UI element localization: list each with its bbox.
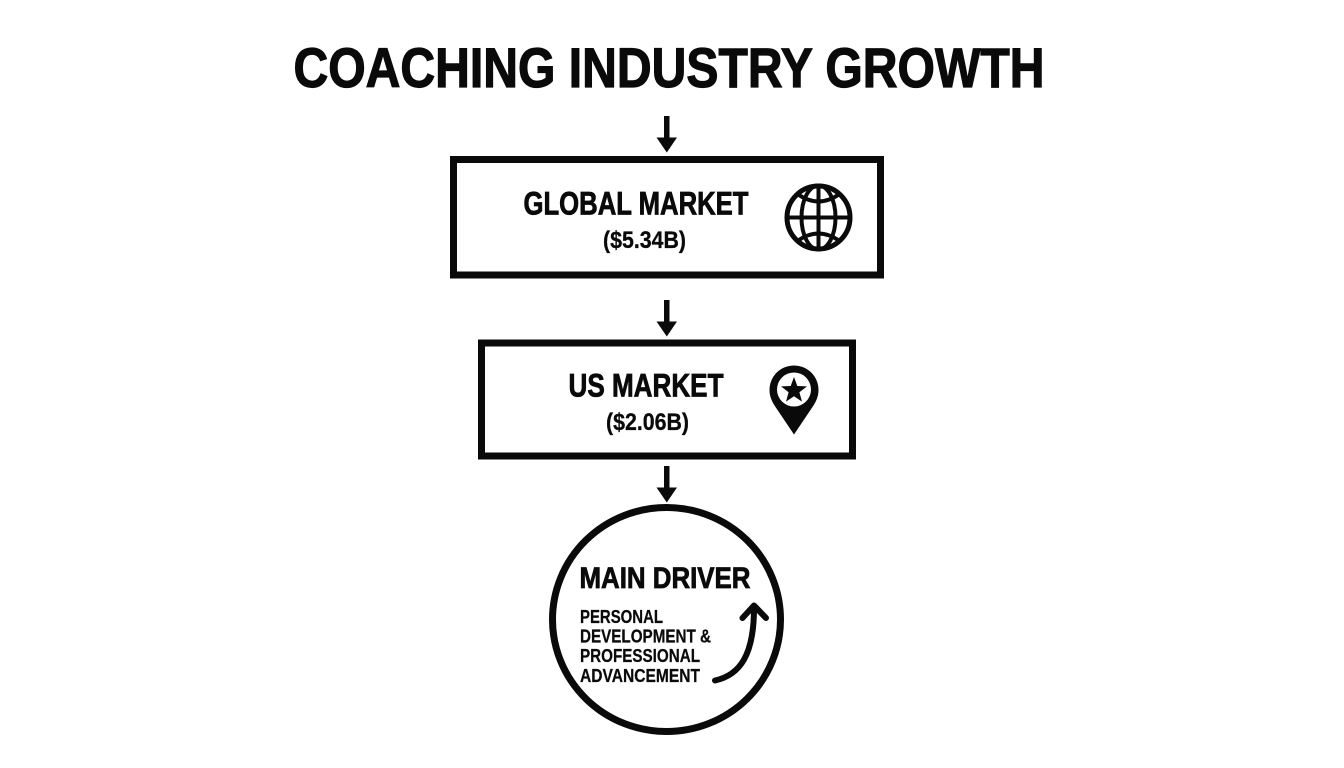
panel: main driver <box>552 508 780 732</box>
panel: us market <box>482 343 852 456</box>
heading: global market: GLOBAL MARKET <box>524 186 749 222</box>
value: us market: ($2.06B) <box>606 409 689 436</box>
value: global market: ($5.34B) <box>603 227 686 254</box>
text: driver description: ADVANCEMENT <box>580 666 700 686</box>
circle outline <box>552 508 780 732</box>
icon: curved upward arrow <box>715 606 766 680</box>
text: driver description: PERSONAL <box>580 607 663 627</box>
heading: us market: US MARKET <box>568 368 724 404</box>
arrow: title to global market <box>656 116 677 152</box>
heading: main driver: MAIN DRIVER <box>580 562 750 595</box>
icon: location pin with star <box>770 366 818 434</box>
title: COACHING INDUSTRY GROWTH <box>294 36 1044 99</box>
box outline <box>454 160 880 275</box>
text: driver description: PROFESSIONAL <box>580 646 700 666</box>
box outline <box>482 343 852 456</box>
arrow: global market to us market <box>656 300 677 336</box>
arrow: us market to main driver <box>656 466 677 502</box>
text: driver description: DEVELOPMENT & <box>580 626 711 646</box>
text: driver description <box>580 607 711 686</box>
panel: global market <box>454 160 880 275</box>
icon: globe <box>786 186 850 250</box>
